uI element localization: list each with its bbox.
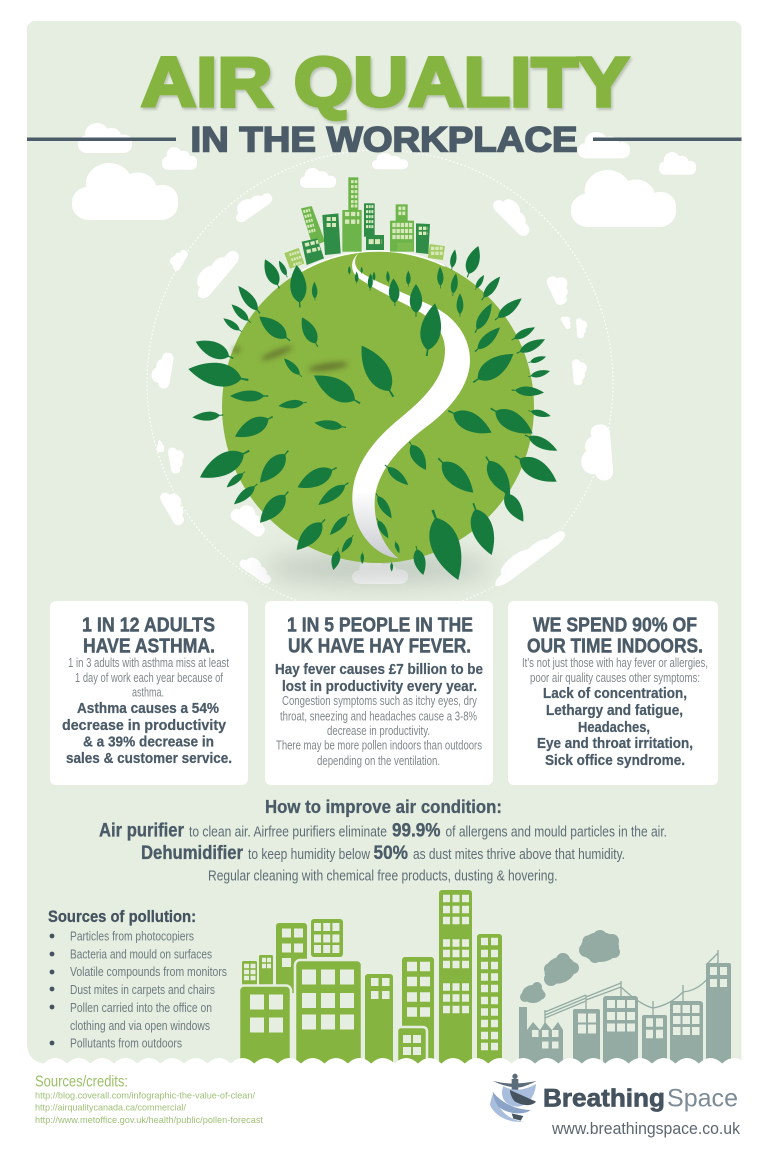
- heading: hay fever: UK HAVE HAY FEVER.: [288, 634, 471, 658]
- title: [27, 43, 742, 160]
- sources of pollution list: Pollen carried into the office on: [70, 1000, 212, 1015]
- leaves and trees: [186, 244, 562, 585]
- panel: asthma: [50, 601, 248, 785]
- sources of pollution list: [48, 907, 227, 1050]
- heading: how to improve: How to improve air condition:: [265, 796, 502, 817]
- globe illustration: [186, 177, 562, 585]
- credits heading: Sources/credits:: [35, 1074, 128, 1090]
- text: symptom list: Headaches,: [578, 719, 650, 736]
- text: missed work: 1 in 3 adults with asthma miss at least: [68, 655, 229, 670]
- heading: sources: Sources of pollution:: [48, 907, 196, 926]
- text: intro: poor air quality causes other symptoms:: [530, 670, 700, 685]
- line: dehumidifier: Dehumidifier: [141, 843, 244, 864]
- heading: time indoors: OUR TIME INDOORS.: [527, 634, 703, 658]
- line: dehumidifier: to keep humidity below: [248, 847, 370, 863]
- heading: hay fever: 1 IN 5 PEOPLE IN THE: [287, 614, 473, 636]
- icon: person and swirl globe: [490, 1074, 537, 1122]
- credits links: [35, 1090, 263, 1126]
- credits links: http://blog.coverall.com/infographic-the-value-of-clean/: [35, 1090, 255, 1102]
- sources of pollution list: Particles from photocopiers: [70, 928, 194, 944]
- line: air purifier: [99, 820, 667, 842]
- text: symptom list: Lethargy and fatigue,: [546, 702, 683, 719]
- line: dehumidifier: 50%: [374, 843, 408, 864]
- text: productivity impact: decrease in productivity: [62, 717, 227, 734]
- heading: asthma: 1 IN 12 ADULTS: [82, 614, 215, 636]
- sources of pollution list: Dust mites in carpets and chairs: [70, 982, 215, 997]
- line: dehumidifier: as dust mites thrive above that humidity.: [413, 847, 625, 863]
- clouds: [72, 123, 696, 589]
- line: air purifier: to clean air. Airfree purifiers eliminate: [189, 824, 387, 840]
- line: dehumidifier: [141, 843, 625, 864]
- heading: hay fever: [287, 614, 473, 658]
- text: symptoms: [276, 693, 482, 768]
- logo: breathing space: [490, 1074, 740, 1138]
- logo: breathing space: Space: [667, 1084, 738, 1112]
- text: symptom list: Lack of concentration,: [543, 685, 687, 702]
- credits links: http://www.metoffice.gov.uk/health/public/pollen-forecast: [35, 1115, 263, 1126]
- line: regular cleaning: Regular cleaning with chemical free products, dusting & hovering.: [208, 868, 558, 884]
- text: symptom list: Eye and throat irritation,: [537, 735, 693, 752]
- text: productivity impact: Asthma causes a 54%: [77, 700, 219, 717]
- text: symptoms: depending on the ventilation.: [317, 753, 440, 768]
- title: air quality: AIR QUALITY: [141, 43, 629, 121]
- sources and credits: [35, 1074, 263, 1126]
- smoke clouds: [520, 930, 620, 1003]
- text: productivity impact: sales & customer service.: [66, 750, 232, 767]
- text: symptoms: Congestion symptoms such as itchy eyes, dry: [282, 693, 477, 708]
- smudges: [232, 344, 349, 373]
- subtitle: in the workplace: IN THE WORKPLACE: [190, 120, 578, 160]
- wordmark: Breathing: [543, 1084, 665, 1112]
- text: symptom list: [537, 685, 693, 769]
- text: cost of hay fever: lost in productivity every year.: [282, 678, 477, 695]
- heading: time indoors: WE SPEND 90% OF: [533, 614, 697, 636]
- sources of pollution list: clothing and via open windows: [70, 1018, 210, 1033]
- text: cost of hay fever: Hay fever causes £7 billion to be: [275, 661, 483, 678]
- winding road: [352, 252, 470, 558]
- text: intro: [522, 655, 708, 685]
- panel: time indoors: [508, 601, 718, 785]
- credits links: http://airqualitycanada.ca/commercial/: [35, 1102, 186, 1114]
- text: missed work: asthma.: [132, 684, 164, 700]
- text: missed work: 1 day of work each year because of: [75, 670, 223, 685]
- sources of pollution list: Bacteria and mould on surfaces: [70, 946, 212, 962]
- scalloped bottom edge: [20, 1046, 746, 1080]
- line: air purifier: of allergens and mould particles in the air.: [446, 824, 667, 840]
- line: air purifier: 99.9%: [392, 820, 441, 842]
- dotted orbit ring: [147, 150, 613, 616]
- text: symptom list: Sick office syndrome.: [545, 752, 685, 769]
- text: symptoms: throat, sneezing and headaches cause a 3-8%: [280, 708, 477, 724]
- green city skyline: [239, 890, 502, 1072]
- city on the globe: [284, 177, 445, 269]
- text: productivity impact: & a 39% decrease in: [83, 734, 214, 750]
- sources of pollution list: Volatile compounds from monitors: [70, 964, 227, 979]
- text: cost of hay fever: [275, 661, 483, 695]
- heading: asthma: [82, 614, 215, 658]
- section: how to improve air condition: [99, 796, 667, 884]
- sources of pollution list: Pollutants from outdoors: [70, 1036, 182, 1050]
- website: www.breathingspace.co.uk: [551, 1119, 740, 1138]
- panel: hay fever: [265, 601, 493, 785]
- text: symptoms: There may be more pollen indoors than outdoors: [276, 738, 482, 752]
- heading: asthma: HAVE ASTHMA.: [83, 634, 215, 658]
- text: intro: It's not just those with hay fever or allergies,: [522, 655, 708, 670]
- line: air purifier: Air purifier: [99, 820, 185, 842]
- heading: time indoors: [527, 614, 703, 658]
- text: missed work: [68, 655, 229, 700]
- grey industrial skyline with smoke: [519, 930, 731, 1069]
- text: symptoms: decrease in productivity.: [327, 723, 430, 738]
- text: productivity impact: [62, 700, 232, 767]
